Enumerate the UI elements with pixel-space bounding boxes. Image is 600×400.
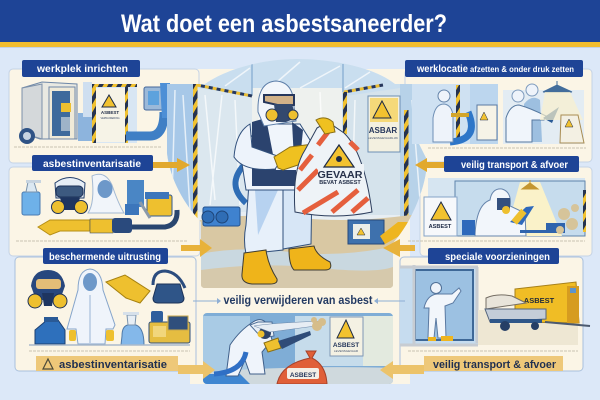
icon: white protective suit	[67, 269, 115, 344]
sign ASBEST: ASBEST	[333, 342, 359, 349]
icon: spray bottle	[121, 312, 144, 345]
icon: respirator mask	[52, 178, 88, 214]
hazard sign ASBAR: LEVENSGEVAARLIJK	[368, 136, 398, 140]
central illustration: worker with asbestos bag	[160, 55, 430, 290]
panel: left 1 werkplek inrichten	[9, 69, 199, 163]
label: speciale voorzieningen: speciale voorzieningen	[445, 252, 550, 263]
arrow: right 1 to center	[415, 158, 444, 172]
yellow boots	[242, 246, 331, 284]
panel: left 3 beschermende uitrusting	[15, 257, 196, 371]
warning bag GEVAAR: GEVAAR	[318, 170, 363, 181]
label: werklocatie afzetten en onder druk zetten: werklocatie	[416, 64, 468, 75]
panel: right 3 speciale voorzieningen	[400, 257, 590, 371]
scene: trailer and yellow container	[478, 282, 590, 345]
label: speciale voorzieningen	[428, 248, 559, 264]
arrow: right 3 to bottom scene	[380, 361, 424, 379]
worker	[214, 317, 326, 376]
hood and respirator	[258, 81, 298, 126]
torso and harness	[240, 118, 310, 190]
panel: bottom scene removing asbestos	[203, 313, 393, 384]
label: veilig transport en afvoer yellow: veilig transport & afvoer	[433, 359, 557, 371]
plastic enclosure	[160, 55, 430, 225]
scene: worker with hose at enclosure	[412, 84, 498, 144]
header band with title	[0, 0, 600, 48]
label: asbestinventarisatie yellow	[36, 356, 178, 371]
icon: blue bag with hose	[153, 271, 185, 303]
caption band: veilig verwijderen van asbest: veilig verwijderen van asbest	[224, 293, 373, 307]
scene: decon booth with worker	[400, 265, 478, 345]
scene group: right panel 1 workers	[412, 81, 584, 144]
label: beschermende uitrusting	[43, 248, 168, 264]
hazard sign ASBAR: ASBAR	[369, 126, 397, 135]
panel: right 2 veilig transport	[408, 167, 592, 256]
icon: spray bottle	[22, 180, 41, 215]
label: asbestinventarisatie yellow: asbestinventarisatie	[59, 359, 167, 371]
scene: decontamination unit and entrance	[19, 82, 170, 144]
panel: left 2 asbestinventarisatie	[9, 167, 200, 256]
label: werklocatie afzetten en onder druk zetten	[405, 60, 583, 77]
label: veilig transport en afvoer: veilig transport & afvoer	[461, 160, 568, 171]
label: beschermende uitrusting: beschermende uitrusting	[49, 252, 161, 263]
scene: right panel 2 worker removing material: ASBEST	[429, 224, 452, 230]
red bag ASBEST: ASBEST	[290, 372, 316, 379]
hazard sign ASBAR	[368, 96, 400, 152]
red bag ASBEST	[277, 351, 327, 384]
worker legs	[244, 190, 312, 252]
label: veilig transport en afvoer	[444, 156, 579, 172]
scene: decontamination unit and entrance: ASBEST	[101, 110, 119, 115]
header band with title: Wat doet een asbestsaneerder?	[121, 10, 447, 38]
arrow: left 3 to bottom scene	[178, 361, 215, 379]
hose	[235, 165, 246, 203]
label: werkplek inrichten	[22, 60, 140, 77]
icon: yellow pump unit	[149, 311, 190, 343]
label: werklocatie afzetten en onder druk zetten: afzetten & onder druk zetten	[470, 65, 574, 74]
label: werkplek inrichten: werkplek inrichten	[36, 64, 128, 75]
icon: filter machine	[125, 180, 172, 218]
icon: white hood	[88, 174, 124, 213]
sign ASBEST	[330, 317, 363, 356]
icon: full face respirator	[28, 270, 67, 308]
scene: right panel 2 worker removing material	[424, 178, 586, 236]
arm and glove	[234, 124, 316, 170]
icon: blue vacuum unit	[35, 317, 65, 344]
scene: two workers with tablet	[503, 81, 584, 144]
scene: decontamination unit and entrance: VERWIJDERING	[100, 117, 120, 120]
label: asbestinventarisatie	[32, 155, 153, 171]
blue machine left	[202, 207, 240, 226]
equipment box right	[348, 220, 410, 244]
icon: long yellow glove and hose	[38, 210, 177, 235]
icon: yellow gloves	[106, 275, 150, 303]
label: asbestinventarisatie: asbestinventarisatie	[43, 159, 141, 170]
arrow: left 1 to center	[153, 158, 190, 172]
arrow: right 2 to center	[383, 239, 415, 257]
warning bag GEVAAR	[294, 118, 372, 216]
sign ASBEST: LEVENSGEVAAR	[334, 349, 359, 353]
arrow: left 2 to center	[181, 239, 212, 257]
scene: trailer and yellow container: ASBEST	[524, 296, 555, 305]
ground	[199, 214, 412, 288]
warning bag GEVAAR: BEVAT ASBEST	[319, 180, 361, 186]
panel: right 1 werklocatie	[405, 69, 592, 162]
